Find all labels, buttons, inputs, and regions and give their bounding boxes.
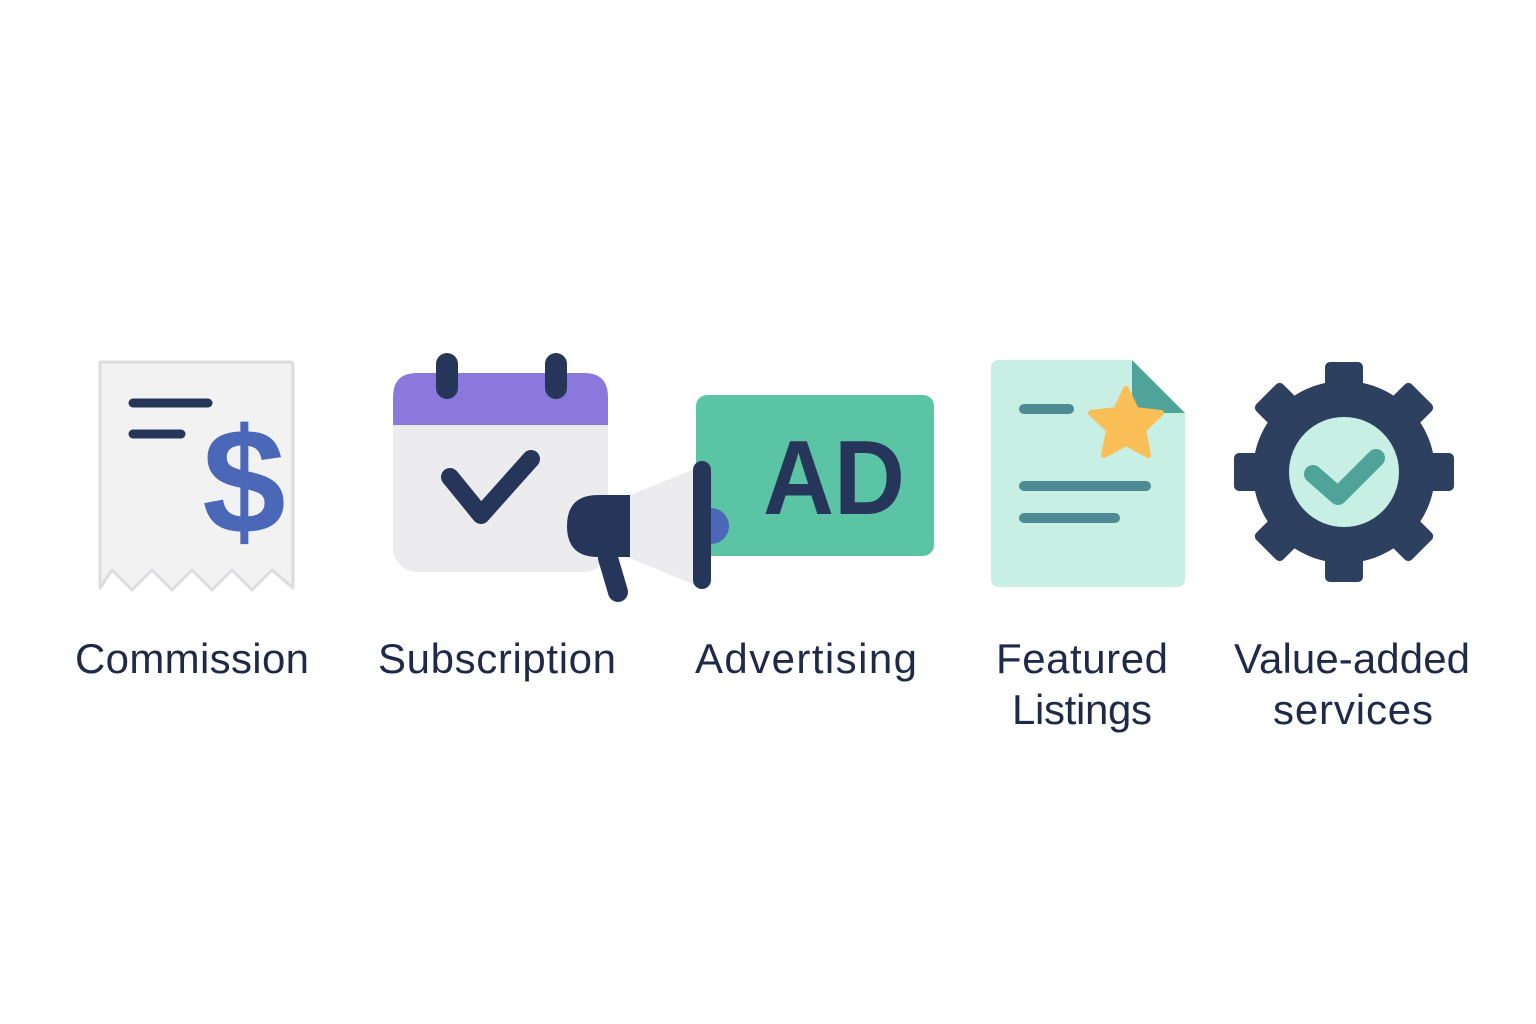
label: Commission: Commission	[75, 635, 309, 682]
label: Featured Listings: Featured	[996, 635, 1168, 682]
label: Featured Listings	[996, 635, 1168, 733]
icon: receipt	[100, 362, 293, 590]
label: Advertising: Advertising	[695, 635, 917, 682]
icon: ad panel: AD	[763, 419, 905, 537]
label: Value-added services	[1234, 635, 1470, 733]
icon: ad panel	[696, 395, 934, 556]
label: Subscription: Subscription	[378, 635, 616, 682]
icon: megaphone	[567, 468, 729, 592]
label: Value-added services: services	[1273, 686, 1433, 733]
icon: calendar	[393, 364, 608, 572]
icon: receipt: $	[202, 397, 286, 565]
label: Featured Listings: Listings	[1012, 686, 1152, 733]
icon: gear with check	[1234, 362, 1454, 582]
label: Value-added services: Value-added	[1234, 635, 1470, 682]
icon: featured document	[991, 360, 1185, 587]
